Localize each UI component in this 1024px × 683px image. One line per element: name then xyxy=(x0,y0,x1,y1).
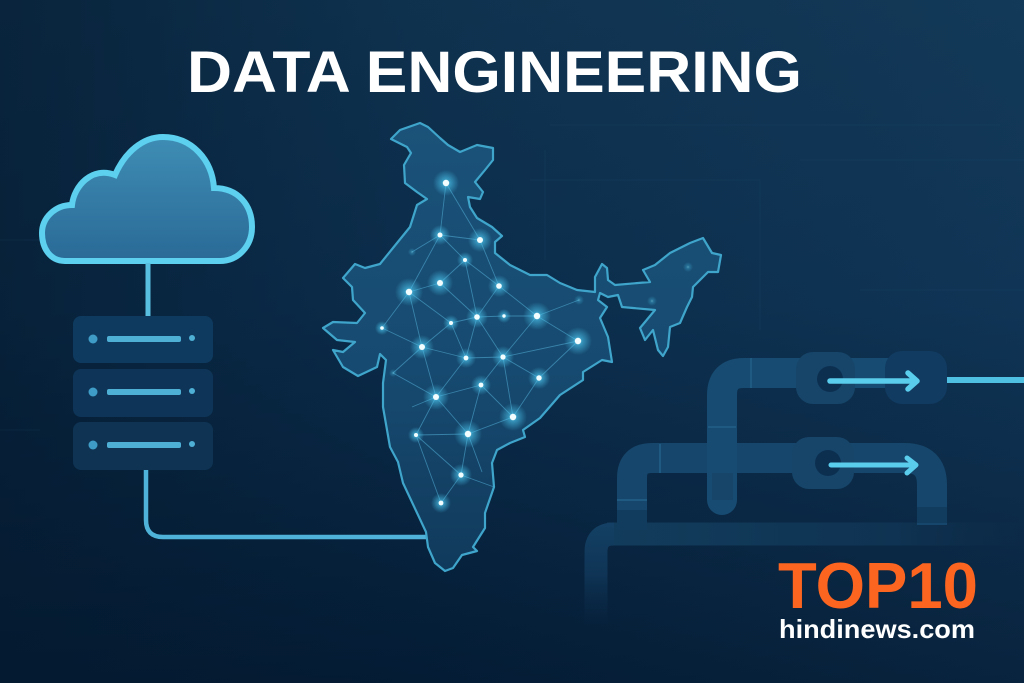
server unit 1 xyxy=(73,316,213,363)
connector: servers to map xyxy=(146,470,428,537)
icon: cloud xyxy=(42,137,252,261)
data pipelines xyxy=(596,358,1024,625)
coupler 2 xyxy=(885,351,947,404)
title: DATA ENGINEERING xyxy=(187,40,802,105)
logo: TOP10: TOP10 xyxy=(778,549,978,622)
pipe: middle run xyxy=(632,458,932,530)
coupler 1 xyxy=(796,352,855,404)
pipe joints xyxy=(617,358,751,500)
pipe: lower left bend xyxy=(596,534,614,625)
map outline xyxy=(323,123,721,571)
logo: hindinews.com: hindinews.com xyxy=(779,614,975,644)
coupler 3 xyxy=(792,437,854,489)
pipe: upper run xyxy=(722,373,905,500)
logo xyxy=(778,549,978,644)
arrow: lower flow xyxy=(831,458,916,473)
pipe: lower long run xyxy=(607,522,1024,546)
pipe shade over lower run xyxy=(617,507,947,530)
output line xyxy=(947,377,1024,383)
server stack xyxy=(73,316,213,470)
network links xyxy=(382,183,579,503)
server unit 2 xyxy=(73,369,213,417)
pipe stem overlay xyxy=(712,473,733,500)
arrow: upper flow xyxy=(830,373,917,389)
map of India xyxy=(323,123,721,571)
network nodes xyxy=(375,170,693,513)
server unit 3 xyxy=(73,422,213,470)
connector: cloud to servers xyxy=(146,263,150,316)
